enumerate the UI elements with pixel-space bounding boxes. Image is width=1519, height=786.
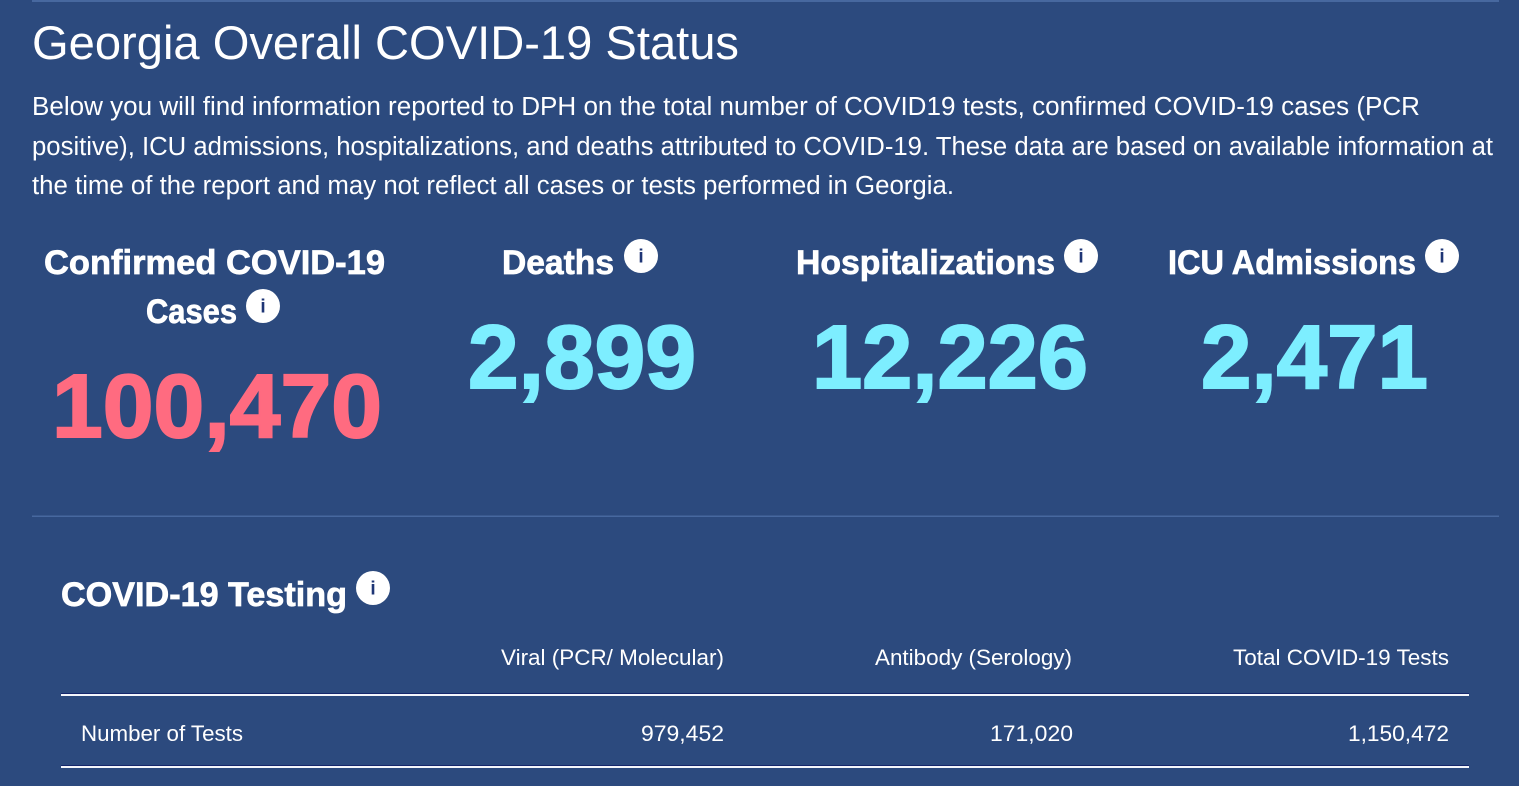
ICU admissions label: ICU Admissions [1168,244,1416,282]
icon: info testing [356,571,390,605]
table data row: Number of Tests [81,721,243,746]
icon: info ICU [1425,239,1459,273]
intro paragraph: Below you will find information reported to DPH on the total number of COVID19 tests, confirmed COVID-19 cases (PCR [32,93,1420,121]
icon: info testing: i [370,578,376,600]
icon: info deaths [624,239,658,273]
intro paragraph: positive), ICU admissions, hospitalizations, and deaths attributed to COVID-19. These data are based on available information at [32,133,1493,161]
icon: info cases [246,289,280,323]
ICU admissions value: 2,471 [1201,308,1428,408]
icon: info ICU: i [1439,246,1445,268]
deaths label: Deaths [502,244,614,282]
icon: info deaths: i [638,246,644,268]
confirmed cases label: Cases [146,293,237,331]
testing heading: COVID-19 Testing [61,576,347,614]
confirmed cases label: Confirmed COVID-19 [44,244,385,282]
table header row: Total COVID-19 Tests [1233,645,1449,670]
table header row [501,645,1449,670]
stat: confirmed cases [44,244,385,457]
hospitalizations label: Hospitalizations [796,244,1055,282]
icon: info cases: i [260,296,266,318]
hospitalizations value: 12,226 [812,308,1088,408]
table data row [81,721,1449,746]
testing table [61,645,1469,768]
table data row: 1,150,472 [1348,721,1449,746]
confirmed cases label [44,244,385,331]
intro paragraph [32,93,1493,200]
intro paragraph: the time of the report and may not reflect all cases or tests performed in Georgia. [32,172,954,200]
title: Georgia Overall COVID-19 Status [32,16,739,69]
icon: info hospitalizations: i [1078,246,1084,268]
table header row: Viral (PCR/ Molecular) [501,645,724,670]
deaths value: 2,899 [468,308,696,408]
stat: ICU admissions [1168,239,1459,408]
table header row: Antibody (Serology) [875,645,1072,670]
stat: deaths [468,239,696,408]
stat: hospitalizations [796,239,1098,408]
table data row: 979,452 [641,721,724,746]
table data row: 171,020 [990,721,1073,746]
icon: info hospitalizations [1064,239,1098,273]
confirmed cases value: 100,470 [52,357,382,457]
